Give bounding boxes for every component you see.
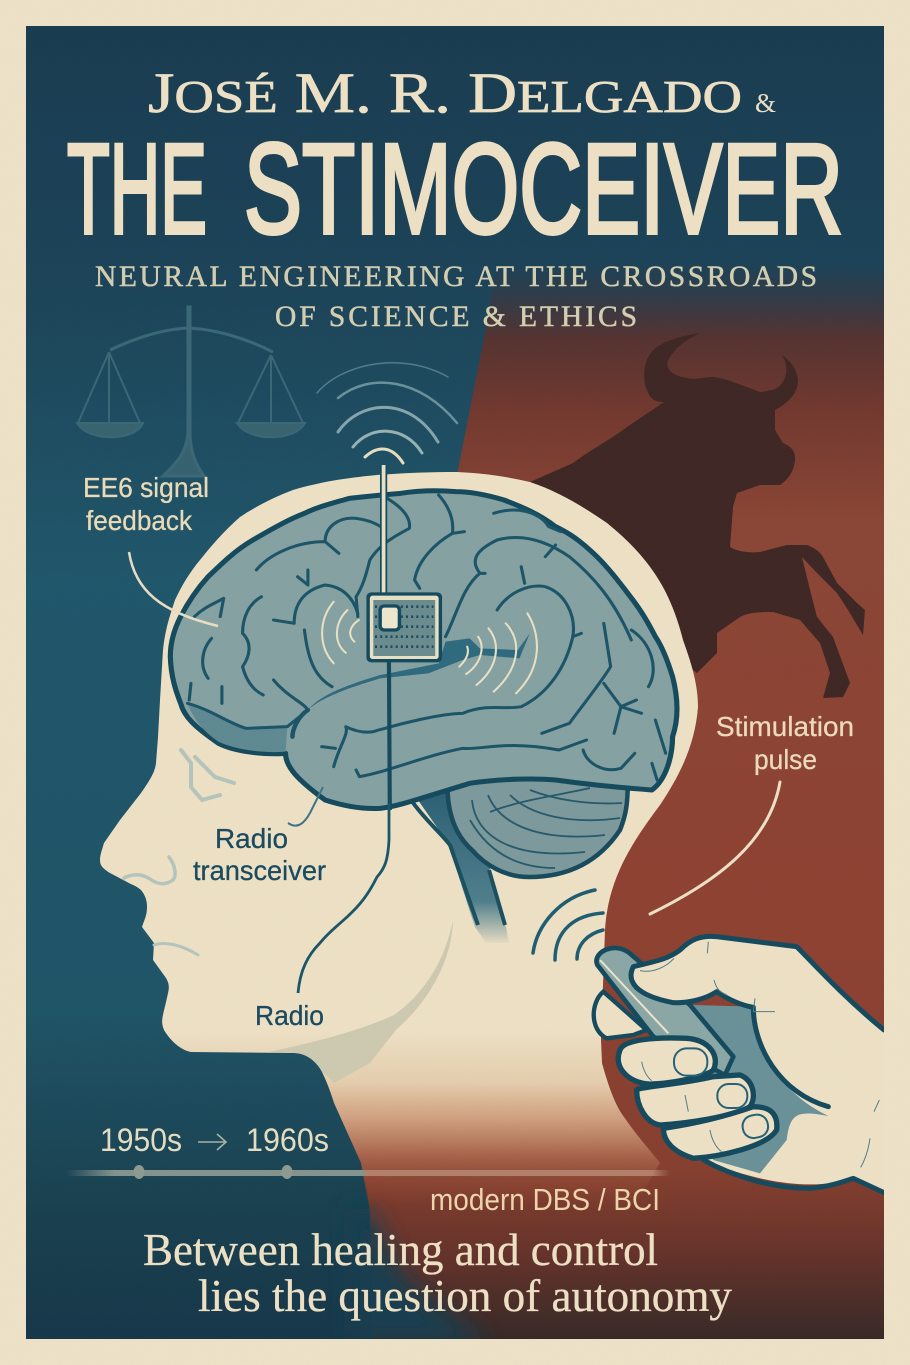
EEG leader line xyxy=(129,552,218,626)
jaw shadow xyxy=(269,920,453,1083)
nostril xyxy=(124,857,175,884)
eye xyxy=(181,750,234,800)
subtitle line 1: NEURAL ENGINEERING AT THE CROSSROADS xyxy=(95,261,817,293)
left pan xyxy=(78,352,140,423)
transceiver leader line xyxy=(288,787,323,826)
nails xyxy=(674,1048,770,1140)
subtitle line 2: OF SCIENCE & ETHICS xyxy=(275,301,637,333)
label: EEG signal feedback: EE6 signal xyxy=(83,472,209,503)
column xyxy=(163,307,204,476)
scales of justice xyxy=(77,307,305,476)
implant chip xyxy=(366,592,442,662)
label: stimulation pulse xyxy=(716,711,854,775)
lateral fissure xyxy=(308,633,530,710)
palm shadow xyxy=(653,1005,828,1173)
thumb and back of hand xyxy=(631,936,884,1193)
title line 2: THE xyxy=(67,118,207,261)
right pan xyxy=(238,355,303,423)
timeline xyxy=(66,1122,670,1217)
label: stimulation pulse: pulse xyxy=(754,744,817,775)
ring finger xyxy=(663,1107,777,1158)
middle finger xyxy=(637,1075,753,1125)
thumb and hand outline xyxy=(631,936,884,1193)
label: radio transceiver xyxy=(193,823,326,886)
antenna rod xyxy=(382,465,386,592)
label: radio transceiver: Radio xyxy=(215,823,288,854)
title xyxy=(67,62,843,261)
timeline markers xyxy=(134,1165,144,1179)
brain folds xyxy=(188,495,666,780)
index finger xyxy=(618,1038,715,1084)
head silhouette xyxy=(100,472,698,1213)
ampersand: & xyxy=(755,88,776,118)
timeline axis xyxy=(66,1170,670,1176)
stimulation leader line xyxy=(650,782,780,914)
soft teal wedge at bottom xyxy=(368,1198,487,1339)
brain stem edges xyxy=(411,800,505,925)
broadcast arcs xyxy=(317,363,457,463)
chip circuit texture xyxy=(373,600,435,656)
label: EEG signal feedback: feedback xyxy=(86,505,193,536)
chip contact xyxy=(380,606,399,630)
1960s label: 1960s xyxy=(246,1122,329,1158)
brain outline xyxy=(170,491,677,809)
label: stimulation pulse: Stimulation xyxy=(716,711,854,742)
hand arcs xyxy=(533,890,603,960)
brain stem xyxy=(419,793,508,942)
controller xyxy=(597,948,733,1075)
cerebellum xyxy=(447,772,628,877)
mouth xyxy=(154,943,198,955)
bull silhouette xyxy=(530,333,865,698)
signal arcs right xyxy=(459,613,537,693)
back finger xyxy=(594,992,647,1038)
wire to radio xyxy=(298,803,389,993)
label: radio transceiver: transceiver xyxy=(193,855,326,886)
lower frontal shading xyxy=(188,703,287,752)
subtitle xyxy=(95,261,817,333)
skin creases xyxy=(640,942,879,1167)
label: radio: Radio xyxy=(255,1000,324,1031)
signal arcs left xyxy=(322,602,359,663)
cerebellum body xyxy=(447,772,628,877)
controller highlight xyxy=(600,960,668,1033)
modern label: modern DBS / BCI xyxy=(430,1182,660,1217)
cerebellum folds xyxy=(470,788,622,868)
label: EEG signal feedback xyxy=(83,472,209,536)
wire from chip xyxy=(389,630,390,810)
red field xyxy=(364,262,884,1339)
title line 1: JOSÉ M. R. D ELGADO xyxy=(148,62,742,125)
beam xyxy=(110,328,273,352)
1950s label: 1950s xyxy=(100,1122,182,1158)
closing quote: lies the question of autonomy xyxy=(198,1271,732,1321)
hand with controller xyxy=(594,936,884,1193)
brain xyxy=(170,465,677,810)
hand base xyxy=(663,1007,884,1193)
chip housing xyxy=(366,592,442,662)
closing quote xyxy=(143,1225,732,1321)
arrow xyxy=(198,1134,226,1150)
closing quote: Between healing and control xyxy=(143,1225,658,1275)
